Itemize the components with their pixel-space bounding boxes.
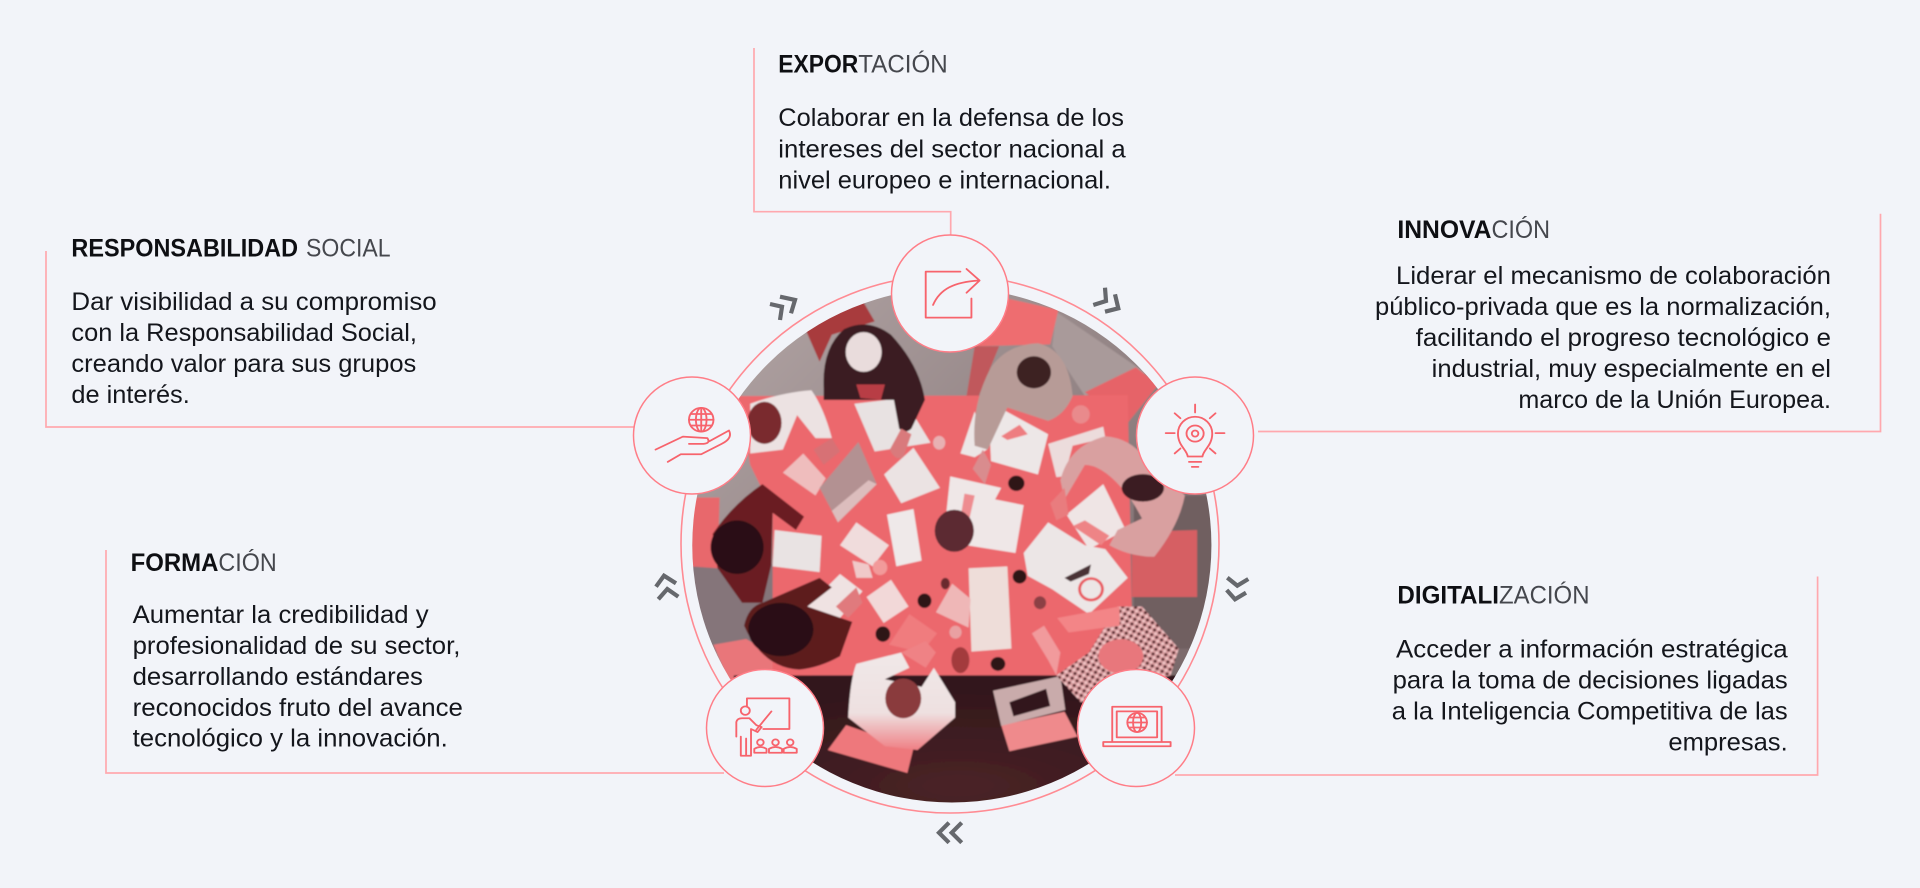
text: innovación description: Liderar el mecanismo de colaboración [1396,262,1831,290]
panel: responsabilidad social [71,234,437,409]
heading: innovación: INNOVA [1397,216,1492,244]
heading: innovación [1397,215,1550,244]
icon: hand holding globe [656,408,730,462]
text: innovación description: industrial, muy especialmente en el [1432,355,1831,383]
text: digitalización description: a la Inteligencia Competitiva de las [1392,698,1788,726]
icon circle: digitalización [1078,670,1194,786]
heading: exportación: EXPOR [778,50,858,78]
heading: formación [131,548,277,577]
text: formación description: reconocidos fruto del avance [133,694,463,722]
text: responsabilidad social description: creando valor para sus grupos [71,350,416,378]
panel: formación [131,548,463,753]
text: responsabilidad social description: Dar visibilidad a su compromiso [71,288,437,316]
connector: exportación [754,48,951,235]
heading: exportación [778,49,948,78]
text: formación description: desarrollando estándares [133,663,423,691]
connector: formación [106,550,724,773]
text: formación description: profesionalidad de su sector, [133,632,460,660]
panel: innovación [1375,215,1831,414]
heading: digitalización: DIGITALI [1397,581,1499,609]
heading: exportación: TACIÓN [858,49,948,78]
icon: presenter with audience [736,698,797,756]
text: digitalización description: empresas. [1668,729,1788,757]
text: innovación description: facilitando el progreso tecnológico e [1416,324,1831,352]
text: digitalización description: para la toma de decisiones ligadas [1393,667,1788,695]
text: responsabilidad social description [71,288,437,409]
text: exportación description: nivel europeo e internacional. [778,166,1111,194]
icon circle: innovación [1136,377,1254,494]
text: responsabilidad social description: de interés. [71,381,190,409]
icon: light bulb with gear [1166,404,1224,467]
text: responsabilidad social description: con la Responsabilidad Social, [71,319,417,347]
text: digitalización description: Acceder a información estratégica [1396,636,1788,664]
text: innovación description: marco de la Unión Europea. [1518,386,1831,414]
outer ring [681,275,1219,813]
icon: laptop with globe [1103,707,1171,746]
icon circle: responsabilidad social [634,377,750,494]
arrow: top left [770,297,795,320]
text: exportación description [778,104,1126,194]
arrow: top right [1093,288,1118,312]
text: exportación description: Colaborar en la defensa de los [778,104,1124,132]
panel: digitalización [1392,580,1788,757]
connector: responsabilidad social [46,251,634,427]
heading: innovación: CIÓN [1492,215,1550,244]
panel: exportación [778,49,1126,194]
heading: responsabilidad social: SOCIAL [306,234,391,262]
text: formación description: Aumentar la credibilidad y [133,601,429,629]
text: formación description: tecnológico y la innovación. [133,725,448,753]
text: formación description [133,601,463,753]
arrow: right [1227,578,1248,599]
heading: formación: CIÓN [218,548,277,577]
connector: innovación [1258,214,1880,432]
text: innovación description [1375,262,1831,414]
heading: digitalización: ZACIÓN [1499,580,1590,609]
arrow: left [656,576,678,599]
heading: formación: FORMA [131,549,218,577]
photo: team meeting around a red table [681,277,1228,813]
text: innovación description: público-privada que es la normalización, [1375,293,1831,321]
text: exportación description: intereses del sector nacional a [778,135,1126,163]
heading: responsabilidad social: RESPONSABILIDAD [71,234,298,262]
icon circle: exportación [892,235,1008,352]
text: digitalización description [1392,636,1788,757]
icon: export arrow [926,269,980,318]
heading: digitalización [1397,580,1590,609]
arrow: bottom [939,823,962,843]
connector: digitalización [1175,576,1818,775]
icon circle: formación [706,670,824,786]
